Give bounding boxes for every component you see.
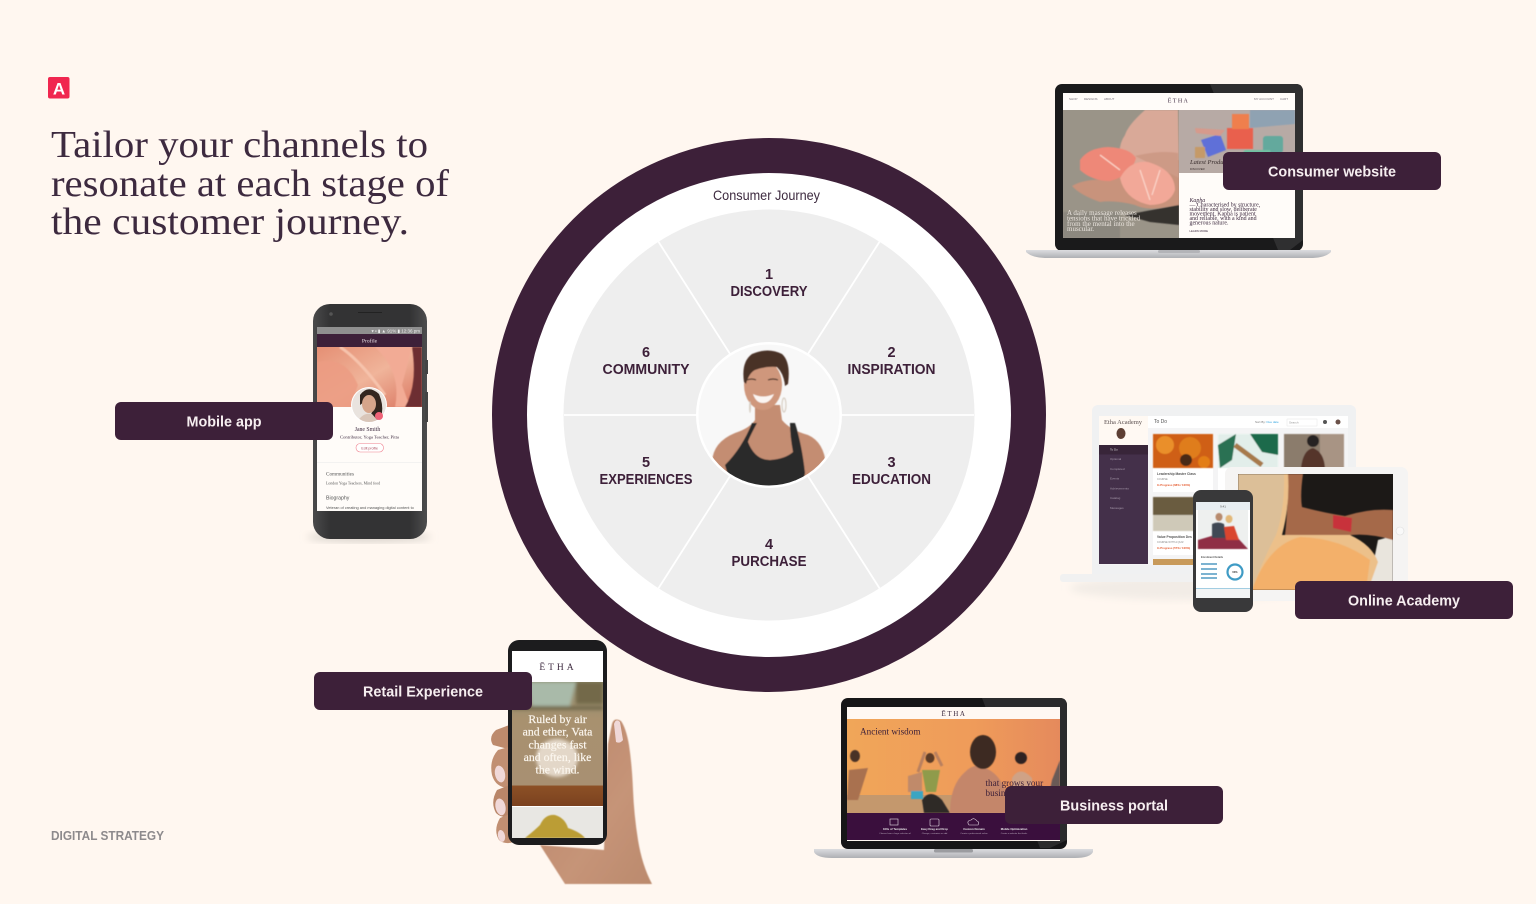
academy sidebar: Catalog — [1110, 496, 1121, 500]
stage 3 education: EDUCATION — [852, 472, 931, 488]
consumer journey wheel — [510, 156, 1028, 674]
stage 4 purchase: 4 — [765, 537, 773, 553]
device: mobile app phone — [307, 304, 431, 542]
footer label: DIGITAL STRATEGY — [51, 828, 164, 843]
course cards: Leadership Master Class — [1157, 472, 1196, 476]
site nav: SHOP — [1069, 97, 1078, 101]
photo: grapefruit in hand: muscular. — [1067, 225, 1094, 233]
stage 1 discovery: 1 — [765, 267, 773, 283]
label: retail experience: Retail Experience — [363, 684, 483, 700]
device: online academy — [1060, 405, 1408, 612]
stage 2 inspiration: INSPIRATION — [848, 362, 936, 378]
academy tablet — [1225, 467, 1408, 601]
course cards: In Progress (68% / 100%) — [1157, 483, 1190, 487]
phone headline: and often, like — [524, 750, 591, 764]
label: mobile app — [115, 402, 333, 440]
gallery photo — [512, 682, 603, 806]
laptop base — [1026, 250, 1331, 258]
academy sidebar: Completed — [1110, 467, 1125, 471]
label: consumer website — [1223, 152, 1441, 190]
app screen: London Yoga Teachers, Mind food — [326, 482, 380, 486]
yoga class photo — [847, 719, 1060, 813]
gold sculpture — [512, 807, 603, 838]
academy laptop: Search — [1289, 420, 1299, 424]
portal feature strip: Easy Drag and Drop — [921, 827, 948, 831]
article text: movement, Kapha is patient — [1190, 212, 1256, 218]
phone headline: the wind. — [536, 762, 580, 776]
title: Tailor your channels to — [51, 124, 428, 166]
article text: Kapha — [1188, 198, 1205, 204]
course cards: COURSE WITH A QUIZ — [1157, 541, 1184, 544]
yoga class photo: that grows your — [986, 778, 1043, 788]
course cards: In Progress (57% / 100%) — [1157, 546, 1190, 550]
stage 2 inspiration: 2 — [887, 345, 896, 361]
app screen: Biography — [326, 496, 350, 502]
photo: product jars: Latest Products — [1189, 159, 1231, 166]
device: retail phone in hand — [491, 640, 652, 884]
site nav — [1069, 97, 1288, 104]
title — [51, 124, 449, 243]
photo: grapefruit in hand — [1063, 110, 1179, 238]
photo: product jars: DISCOVER — [1190, 167, 1205, 171]
article text: and reliable, with a kind and — [1190, 216, 1257, 222]
label: business portal — [1005, 786, 1223, 824]
app screen: ▾ ▪ ▮ ▲ 91% ▮ 12:36 pm — [371, 328, 420, 334]
title: the customer journey. — [51, 201, 409, 243]
academy sidebar: To Do — [1110, 448, 1118, 452]
article text: stability and slow, deliberate — [1190, 207, 1257, 213]
stage 6 community: 6 — [642, 345, 650, 361]
logo — [48, 77, 70, 98]
academy phone: 60% — [1232, 570, 1238, 574]
stage 3 education — [852, 455, 931, 488]
article text: — Characterised by structure, — [1188, 202, 1261, 208]
academy sidebar: Etha Academy — [1104, 419, 1143, 426]
laptop base — [814, 849, 1093, 858]
academy phone: 9:41 — [1220, 504, 1226, 508]
title: resonate at each stage of — [51, 163, 449, 205]
portal feature strip: Change, customize or add — [922, 832, 948, 835]
academy sidebar: Messages — [1110, 506, 1124, 510]
article text: generous nature. — [1190, 220, 1229, 226]
site nav: DESIGNS — [1084, 97, 1098, 101]
stage 2 inspiration — [848, 345, 936, 378]
stage 5 experiences: 5 — [642, 455, 650, 471]
portal screen: ĒTHA — [941, 710, 967, 718]
app screen: Profile — [362, 338, 378, 344]
label: business portal: Business portal — [1060, 798, 1168, 814]
portal feature strip: Choose from a large selection of — [879, 832, 911, 835]
portal screen — [847, 707, 1060, 841]
stage 6 community — [602, 345, 690, 378]
academy sidebar — [1099, 416, 1148, 564]
retail phone — [508, 640, 607, 845]
academy sidebar: Events — [1110, 476, 1120, 480]
app screen: Edit profile — [361, 446, 378, 450]
gray stage wheel — [564, 210, 974, 620]
device: consumer website laptop — [1026, 84, 1331, 258]
academy sidebar: Optional — [1110, 457, 1122, 461]
photo: grapefruit in hand: A daily massage releases — [1067, 209, 1137, 217]
portal feature strip: Create a professional online — [960, 832, 988, 835]
center portrait — [696, 342, 842, 500]
profile text: Jane Smith — [355, 427, 380, 433]
website screen: LEARN MORE — [1190, 229, 1208, 233]
academy phone — [1193, 490, 1253, 612]
stage 4 purchase: PURCHASE — [732, 554, 807, 570]
avatar — [351, 387, 387, 423]
yoga class photo: business — [986, 788, 1017, 798]
academy phone: Enrolment Details — [1201, 555, 1224, 559]
photo: product jars — [1179, 110, 1295, 173]
academy sidebar: Achievements — [1110, 486, 1129, 490]
app screen: Veteran of creating and managing digital content to — [326, 505, 414, 510]
course cards — [1153, 434, 1344, 565]
portal feature strip: Custom Domain — [963, 827, 985, 831]
site nav: ABOUT — [1104, 97, 1115, 101]
label: online academy — [1295, 581, 1513, 619]
stage 5 experiences — [600, 455, 693, 488]
website screen — [1063, 93, 1295, 238]
outer ring — [510, 156, 1028, 674]
logo: A — [53, 80, 65, 98]
stage 1 discovery — [730, 267, 808, 300]
stage 3 education: 3 — [887, 455, 896, 471]
site nav: CART — [1280, 97, 1288, 101]
device: business portal laptop — [814, 698, 1093, 858]
phone headline: and ether, Vata — [523, 724, 593, 738]
course cards: COURSE — [1157, 478, 1168, 481]
academy laptop: Sort By: Due date — [1255, 420, 1279, 424]
hand — [491, 720, 652, 884]
site nav: ĒTHA — [1168, 98, 1189, 104]
academy laptop: To Do — [1154, 419, 1167, 425]
stage 5 experiences: EXPERIENCES — [600, 472, 693, 488]
phone headline: Ruled by air — [528, 712, 587, 726]
phone headline: changes fast — [529, 738, 587, 752]
stage 6 community: COMMUNITY — [602, 362, 690, 378]
journey heading: Consumer Journey — [713, 187, 820, 203]
academy laptop — [1060, 405, 1356, 600]
stage 4 purchase — [732, 537, 807, 570]
portal feature strip — [847, 813, 1060, 840]
photo: grapefruit in hand: from the mental into the — [1067, 220, 1135, 228]
canyon photo — [317, 347, 422, 407]
site nav: MY ACCOUNT — [1254, 97, 1274, 101]
course cards: Value Proposition Des — [1157, 535, 1192, 539]
portal feature strip: Mobile Optimization — [1001, 827, 1028, 831]
portal feature strip: 100s of Templates — [883, 827, 907, 831]
app screen — [317, 327, 422, 511]
yoga class photo: Ancient wisdom — [860, 726, 920, 736]
photo: grapefruit in hand: tensions that have trickled — [1067, 214, 1141, 222]
app screen: Communities — [326, 472, 354, 478]
stage 1 discovery: DISCOVERY — [730, 284, 808, 300]
label: consumer website: Consumer website — [1268, 164, 1396, 180]
portal feature strip: Create a website that looks — [1001, 832, 1028, 835]
retail phone: ĒTHA — [539, 662, 577, 673]
app screen: Contributor, Yoga Teacher, Pitta — [340, 434, 399, 440]
label: retail experience — [314, 672, 532, 710]
label: mobile app: Mobile app — [186, 414, 262, 430]
label: online academy: Online Academy — [1348, 592, 1461, 610]
